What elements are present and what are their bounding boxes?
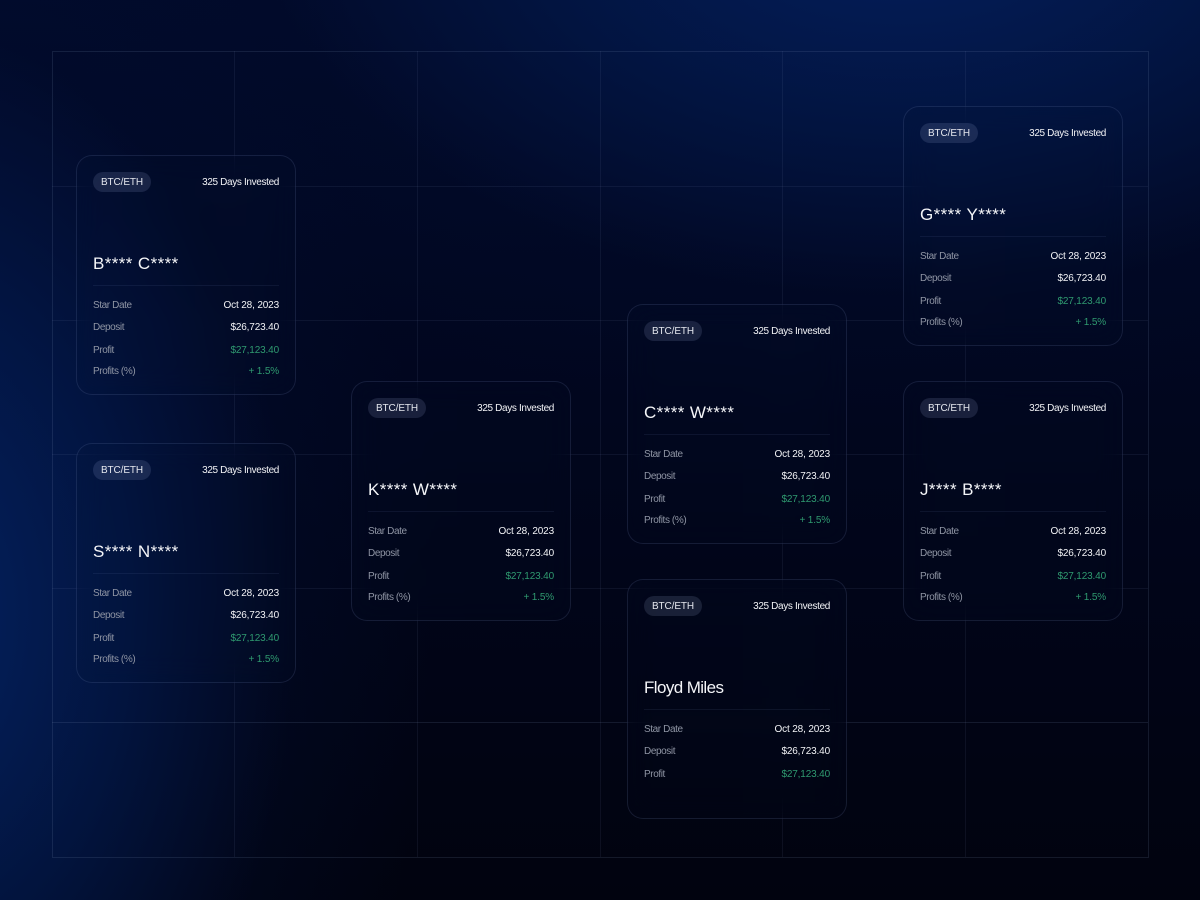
row: deposit: $26,723.40 [230,610,279,621]
investor name: S**** N**** [93,542,179,560]
days invested: 325 Days Invested [1029,403,1106,414]
card: K**** W**** [351,381,571,621]
row: profits percent [93,654,279,665]
pair badge [368,398,426,418]
pair badge: BTC/ETH [652,601,694,612]
days invested: 325 Days Invested [477,403,554,414]
pair badge: BTC/ETH [652,326,694,337]
row: start date [920,526,1106,537]
row: deposit: Deposit [644,746,675,757]
row: profits percent: Profits (%) [93,654,135,665]
row: profit: Profit [920,571,941,582]
row: deposit: $26,723.40 [505,548,554,559]
row: start date: Oct 28, 2023 [775,449,830,460]
row: profit: Profit [644,494,665,505]
row: start date: Star Date [644,449,683,460]
row: deposit: $26,723.40 [1057,548,1106,559]
row: start date: Star Date [93,300,132,311]
pair badge: BTC/ETH [376,403,418,414]
row: deposit [93,322,279,333]
card: G**** Y**** [903,106,1123,346]
row: start date: Star Date [368,526,407,537]
row: profit: $27,123.40 [230,345,279,356]
row: start date [93,588,279,599]
row: profit: $27,123.40 [781,769,830,780]
row: profits percent: + 1.5% [1075,317,1106,328]
row: deposit: $26,723.40 [230,322,279,333]
investor name: B**** C**** [93,254,179,272]
row: profit: Profit [368,571,389,582]
card: B**** C**** [76,155,296,395]
row: profits percent: Profits (%) [920,592,962,603]
row: start date [920,251,1106,262]
pair badge [93,172,151,192]
card: S**** N**** [76,443,296,683]
pair badge [644,321,702,341]
row: deposit [368,548,554,559]
pair badge [93,460,151,480]
days invested: 325 Days Invested [753,326,830,337]
row: profits percent [368,592,554,603]
pair badge: BTC/ETH [101,465,143,476]
row: profit [920,571,1106,582]
row: start date: Oct 28, 2023 [1051,526,1106,537]
days invested: 325 Days Invested [202,177,279,188]
row: deposit: $26,723.40 [781,471,830,482]
row: profits percent: Profits (%) [93,366,135,377]
row: profit: $27,123.40 [505,571,554,582]
row: start date: Oct 28, 2023 [1051,251,1106,262]
days invested: 325 Days Invested [1029,128,1106,139]
row: start date: Oct 28, 2023 [499,526,554,537]
days invested: 325 Days Invested [753,601,830,612]
investor name: K**** W**** [368,480,457,498]
row: deposit: Deposit [920,273,951,284]
row: deposit [920,273,1106,284]
row: profit [368,571,554,582]
row: profit: Profit [644,769,665,780]
row: start date [93,300,279,311]
row: deposit: Deposit [93,610,124,621]
row: profit [920,296,1106,307]
pair badge [920,123,978,143]
row: deposit: Deposit [368,548,399,559]
row: profits percent [644,515,830,526]
investor name: J**** B**** [920,480,1002,498]
row: profits percent: + 1.5% [799,515,830,526]
pair badge: BTC/ETH [101,177,143,188]
card: Floyd Miles [627,579,847,819]
row: deposit: Deposit [920,548,951,559]
row: profits percent: Profits (%) [368,592,410,603]
row: profits percent: + 1.5% [523,592,554,603]
pair badge: BTC/ETH [928,403,970,414]
row: profits percent: Profits (%) [644,515,686,526]
row: profit: Profit [93,345,114,356]
row: profit [644,769,830,780]
card: C**** W**** [627,304,847,544]
row: profits percent: Profits (%) [920,317,962,328]
row: start date: Star Date [920,251,959,262]
investor name: Floyd Miles [644,678,723,696]
row: start date [644,449,830,460]
row: profits percent: + 1.5% [248,654,279,665]
row: profits percent [920,317,1106,328]
row: deposit: Deposit [93,322,124,333]
days invested: 325 Days Invested [202,465,279,476]
row: profit: Profit [920,296,941,307]
row: profits percent [920,592,1106,603]
row: profit: $27,123.40 [781,494,830,505]
row: start date: Star Date [920,526,959,537]
pair badge: BTC/ETH [928,128,970,139]
row: start date: Star Date [644,724,683,735]
row: start date: Oct 28, 2023 [775,724,830,735]
row: profit [93,633,279,644]
row: deposit [920,548,1106,559]
row: profit [644,494,830,505]
card: J**** B**** [903,381,1123,621]
row: deposit: $26,723.40 [1057,273,1106,284]
row: deposit [93,610,279,621]
row: start date [368,526,554,537]
row: profit: $27,123.40 [1057,296,1106,307]
row: profit: Profit [93,633,114,644]
row: start date: Star Date [93,588,132,599]
row: start date: Oct 28, 2023 [224,300,279,311]
row: profit [93,345,279,356]
row: profit: $27,123.40 [230,633,279,644]
investor name: C**** W**** [644,402,734,422]
row: profits percent [93,366,279,377]
row: start date [644,724,830,735]
investor name: G**** Y**** [920,204,1006,224]
pair badge [644,596,702,616]
row: deposit [644,746,830,757]
row: profits percent: + 1.5% [1075,592,1106,603]
pair badge [920,398,978,418]
row: deposit: Deposit [644,471,675,482]
row: start date: Oct 28, 2023 [224,588,279,599]
row: profits percent: + 1.5% [248,366,279,377]
row: deposit: $26,723.40 [781,746,830,757]
row: deposit [644,471,830,482]
row: profit: $27,123.40 [1057,571,1106,582]
